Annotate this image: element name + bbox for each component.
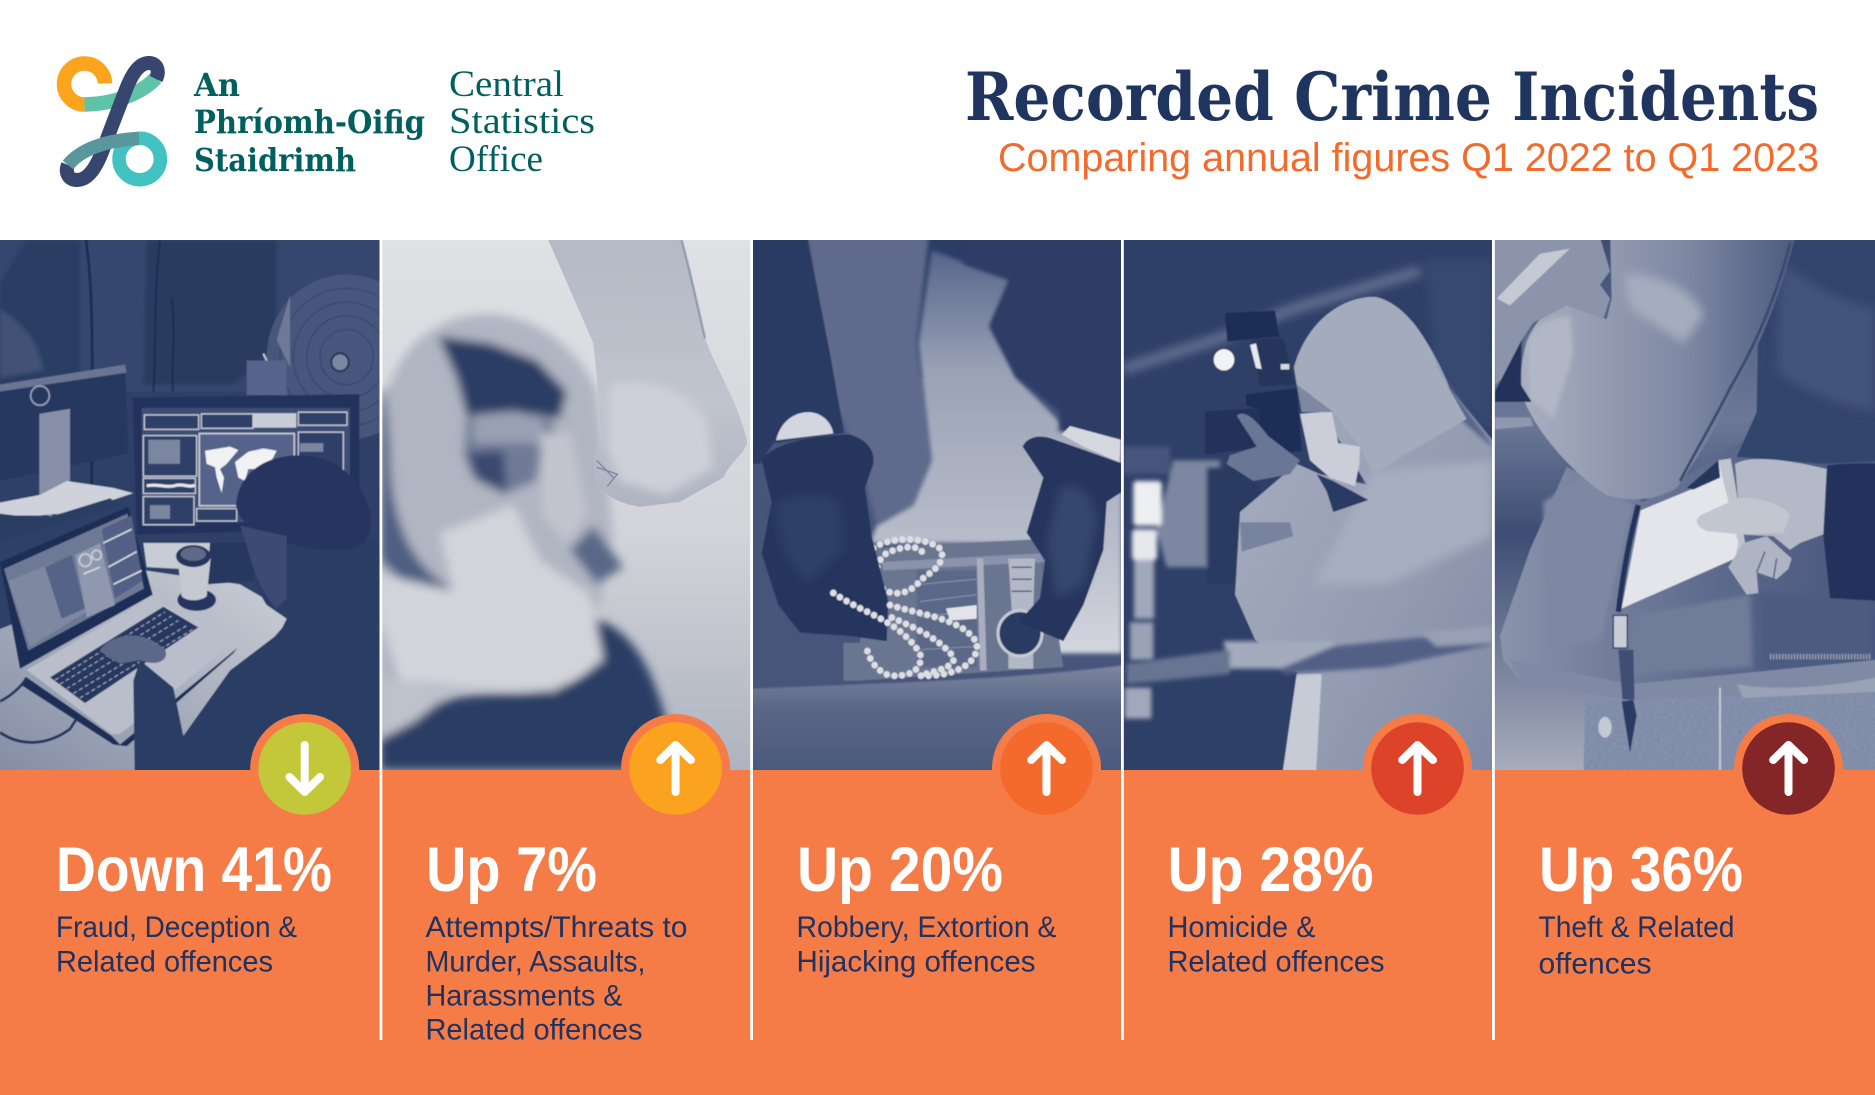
stat: down 41 percent: Down 41%: [56, 835, 332, 905]
panel: assaults: [426, 714, 730, 1046]
icon: up arrow orange circle: [992, 714, 1101, 823]
icon: up arrow maroon circle: [1734, 714, 1843, 823]
hacker silhouette: [100, 454, 370, 770]
description: fraud: Fraud, Deception &: [56, 911, 297, 944]
left monitor: [0, 365, 128, 521]
cables: [0, 677, 77, 742]
description: assaults: Attempts/Threats to: [426, 911, 688, 944]
description: homicide: Related offences: [1168, 946, 1384, 978]
icon: up arrow red circle: [1363, 714, 1472, 823]
face mask: [1300, 411, 1360, 486]
repaint orange band edge: [0, 770, 1875, 772]
world map: [205, 447, 277, 493]
photo: forensic photographer in protective suit: [1124, 240, 1492, 770]
logo wordmark Irish: [193, 66, 425, 179]
description: assaults: Harassments &: [426, 980, 623, 1012]
phone: [1622, 459, 1745, 608]
photo: pickpocket taking phone from jacket: [1494, 240, 1875, 770]
zipper: [1618, 505, 1638, 612]
camera and flash: [1205, 311, 1302, 455]
subtitle: Comparing annual figures Q1 2022 to Q1 2023: [998, 136, 1819, 180]
wrists: [776, 412, 833, 440]
icon: up arrow amber circle: [621, 714, 730, 823]
description: theft: Theft & Related: [1538, 911, 1734, 944]
protective suit: [1235, 297, 1503, 791]
light streak: [1123, 271, 1420, 369]
stat: up 7 percent: Up 7%: [426, 835, 597, 905]
description: robbery: Hijacking offences: [796, 946, 1036, 978]
jewellery box: [843, 539, 1063, 681]
logo wordmark English: Statistics: [449, 101, 595, 142]
logo mark: [64, 63, 160, 180]
logo wordmark Irish: An: [193, 66, 240, 104]
table back left: [750, 464, 843, 691]
description: theft: [1538, 911, 1734, 980]
desk: [0, 570, 288, 770]
photo: gloved hands and jewellery box: [753, 240, 1121, 770]
thief hand: [1697, 459, 1827, 595]
folded arm: [1521, 226, 1798, 499]
jacket hem: [1588, 660, 1875, 698]
left glove: [762, 435, 888, 641]
logo wordmark English: Central: [449, 64, 564, 105]
stat: up 28 percent: Up 28%: [1168, 835, 1374, 905]
description: fraud: [56, 911, 297, 978]
right glove: [1022, 436, 1121, 642]
laptop base and keyboard: [20, 598, 237, 746]
jacket body: [1500, 442, 1875, 684]
coffee cup: [176, 545, 216, 611]
fist and forearm: [548, 240, 747, 507]
logo wordmark English: Office: [449, 139, 543, 180]
column dividers: [380, 240, 1495, 1040]
main monitor: [133, 394, 359, 534]
logo wordmark Irish: Phríomh-Oifig: [194, 103, 425, 141]
orange lower band: [0, 770, 1875, 1095]
logo: Central Statistics Office: [64, 63, 595, 180]
logo wordmark Irish: Staidrimh: [194, 141, 356, 179]
description: homicide: [1168, 911, 1384, 978]
photo: hacker at computers: [0, 240, 380, 770]
photo: raised fist and cowering woman: [380, 240, 760, 770]
dark sleeves: [750, 226, 844, 464]
blurred police tape: [1127, 626, 1492, 684]
panel: fraud: [56, 714, 359, 978]
gloved hand: [1227, 414, 1300, 481]
logo wordmark English: [449, 64, 595, 180]
cuff and left sleeve: [1493, 226, 1610, 385]
wall and body: [805, 226, 932, 526]
fan: [262, 274, 380, 438]
laptop screen: [0, 507, 153, 669]
dark sleeve: [1823, 463, 1875, 602]
description: robbery: Robbery, Extortion &: [796, 911, 1057, 944]
pearls lower strands: [833, 593, 977, 676]
description: fraud: Related offences: [56, 946, 273, 978]
description: assaults: Murder, Assaults,: [426, 946, 646, 978]
table foreground: [753, 664, 1121, 750]
panel: theft: [1538, 714, 1843, 980]
ceiling light: [1214, 349, 1234, 371]
blurred bystander and lights: [1124, 446, 1222, 722]
icon: down arrow lime circle: [250, 714, 359, 823]
description: robbery: [796, 911, 1057, 978]
stat: up 36 percent: Up 36%: [1539, 835, 1743, 905]
panel: homicide: [1168, 714, 1472, 978]
description: homicide: Homicide &: [1168, 911, 1316, 944]
description: theft: offences: [1538, 948, 1652, 980]
blurred figure: [380, 314, 667, 770]
pearls upper strand: [873, 539, 942, 593]
description: assaults: Related offences: [426, 1014, 642, 1046]
stat: up 20 percent: Up 20%: [797, 835, 1003, 905]
description: assaults: [426, 911, 688, 1046]
watch: [998, 559, 1042, 669]
jeans: [1583, 674, 1875, 791]
panel: robbery: [796, 714, 1101, 978]
